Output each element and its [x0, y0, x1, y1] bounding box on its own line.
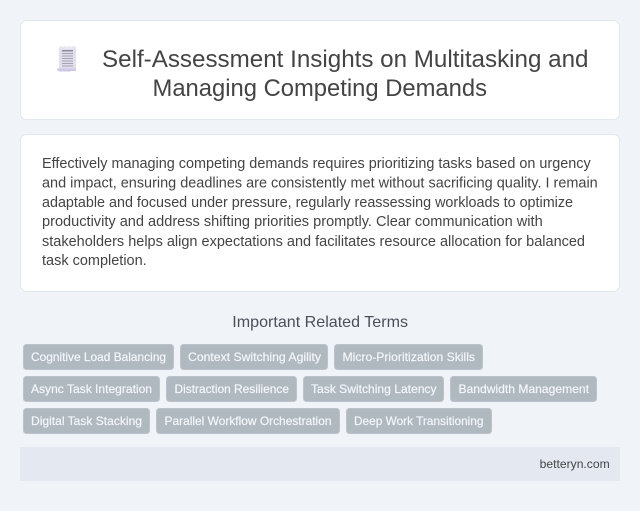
chip: Distraction Resilience: Distraction Resilience: [174, 382, 289, 396]
chip: Parallel Workflow Orchestration: [156, 408, 340, 434]
chip: Parallel Workflow Orchestration: Parallel Workflow Orchestration: [164, 414, 332, 428]
chip: Cognitive Load Balancing: [24, 344, 174, 370]
chip: Bandwidth Management: [450, 376, 596, 402]
icon: document scroll: [57, 46, 76, 72]
chips: related terms: [24, 344, 596, 434]
chip: Bandwidth Management: Bandwidth Management: [458, 382, 590, 396]
panel: summary paragraph card: [20, 134, 620, 292]
title: Self-Assessment Insights on Multitasking and: [102, 46, 588, 73]
panel: title card: [20, 20, 620, 120]
heading: important related terms: Important Related Terms: [232, 314, 408, 331]
chip: Task Switching Latency: [304, 376, 444, 402]
footer source text: betteryn.com: [540, 457, 610, 471]
chip: Async Task Integration: Async Task Integration: [31, 382, 152, 396]
chip: Digital Task Stacking: Digital Task Stacking: [31, 414, 142, 428]
chip: Task Switching Latency: Task Switching Latency: [311, 382, 436, 396]
paragraph text: productivity and address shifting priorities promptly. Clear communication with: [42, 214, 543, 230]
title: [102, 46, 588, 102]
title: Managing Competing Demands: [152, 75, 487, 102]
paragraph text: and impact, ensuring deadlines are consistently met without sacrificing quality. I remain: [42, 176, 598, 192]
chip: Context Switching Agility: [180, 344, 328, 370]
chip: Digital Task Stacking: [24, 408, 150, 434]
chip: Deep Work Transitioning: Deep Work Transitioning: [354, 414, 484, 428]
chip: Micro-Prioritization Skills: Micro-Prioritization Skills: [342, 350, 475, 364]
chip: Cognitive Load Balancing: Cognitive Load Balancing: [31, 350, 166, 364]
paragraph text: Effectively managing competing demands requires prioritizing tasks based on urgency: [42, 156, 591, 172]
chip: Distraction Resilience: [166, 376, 296, 402]
paragraph text: [42, 156, 598, 269]
chip: Context Switching Agility: Context Switching Agility: [188, 350, 321, 364]
chip: Async Task Integration: [24, 376, 160, 402]
paragraph text: task completion.: [42, 253, 147, 269]
footer bar: [20, 447, 620, 481]
chip: Deep Work Transitioning: [346, 408, 492, 434]
paragraph text: stakeholders helps align expectations and facilitates resource allocation for balanced: [42, 234, 585, 250]
chip: Micro-Prioritization Skills: [334, 344, 482, 370]
paragraph text: adaptable and focused under pressure, regularly reassessing workloads to optimize: [42, 195, 573, 211]
